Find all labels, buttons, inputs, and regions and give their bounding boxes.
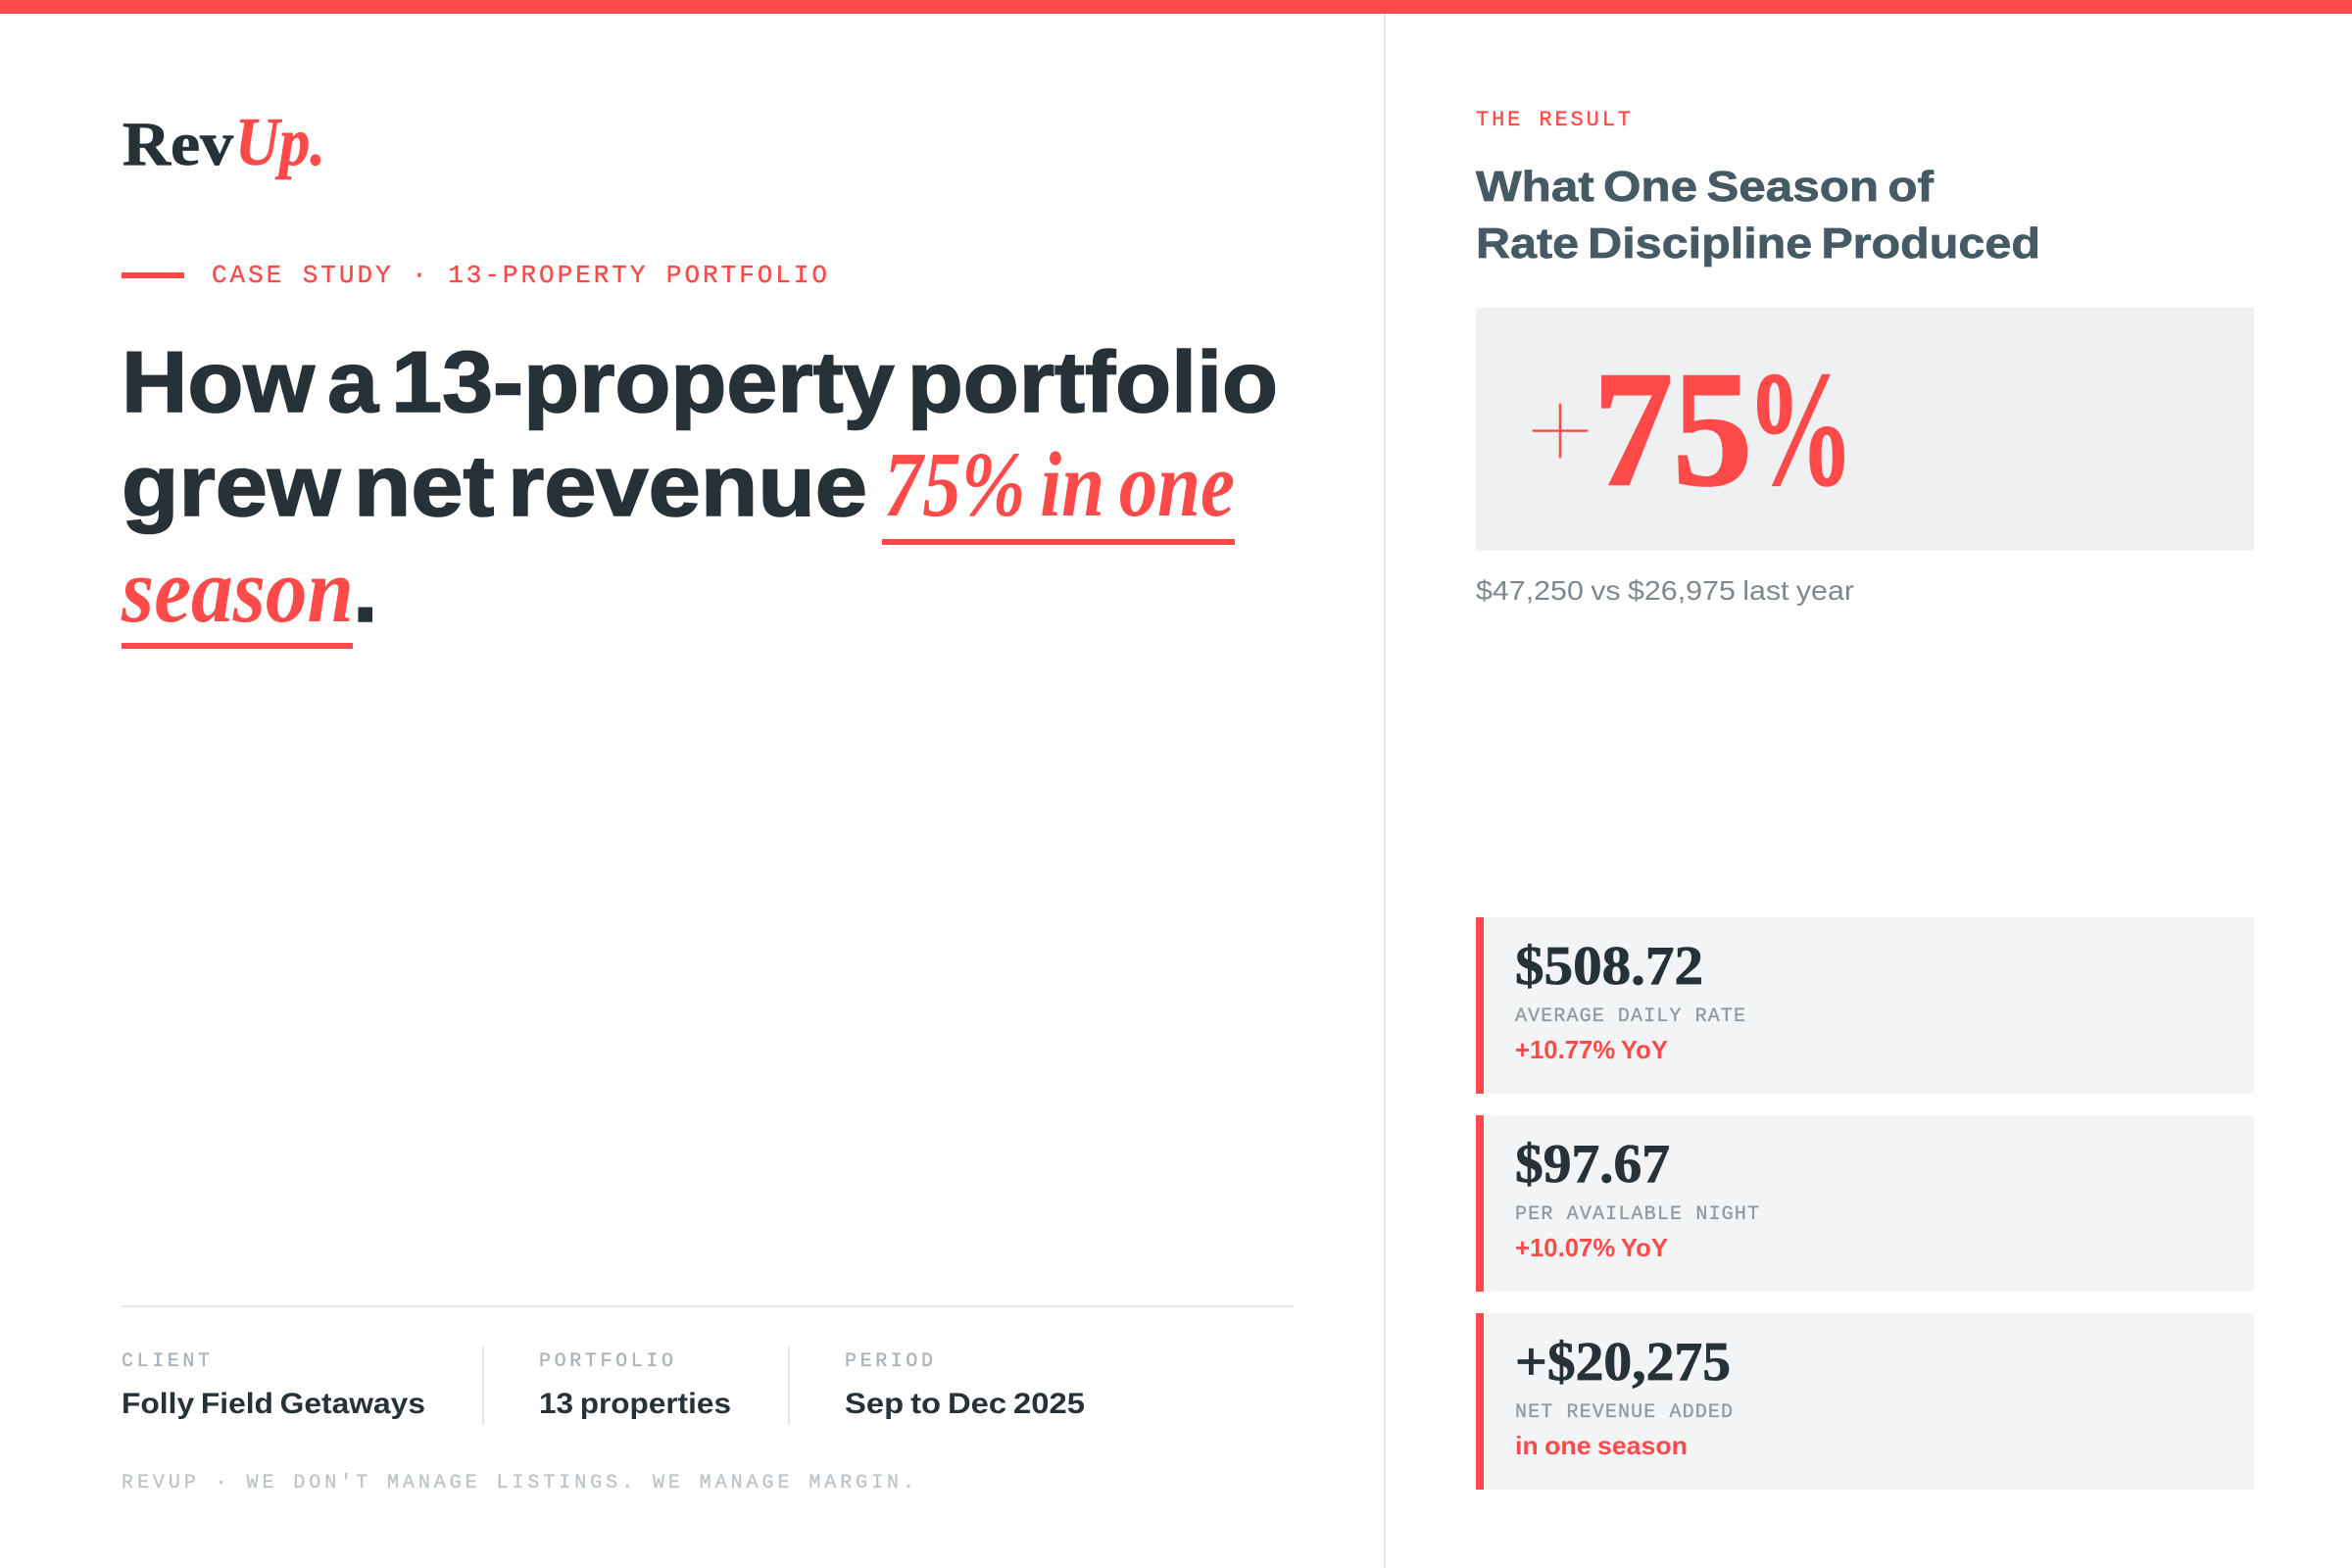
headline: How a 13-property portfolio	[122, 333, 1278, 430]
section label: THE RESULT	[1476, 108, 1631, 132]
headline: season	[121, 540, 354, 642]
card: average daily rate: AVERAGE DAILY RATE	[1515, 1005, 1745, 1028]
meta: client: Folly Field Getaways	[122, 1388, 425, 1420]
meta: portfolio	[539, 1350, 731, 1420]
card: per available night: +10.07% YoY	[1515, 1233, 1668, 1262]
meta: portfolio: 13 properties	[539, 1388, 731, 1420]
logo: Up.	[235, 105, 325, 180]
section heading: What One Season of	[1476, 163, 1934, 211]
section heading: Rate Discipline Produced	[1476, 220, 2040, 268]
meta: client	[122, 1350, 425, 1420]
card: net revenue added: in one season	[1515, 1431, 1688, 1460]
hero stat	[1476, 308, 2254, 551]
panel: left story	[121, 105, 1294, 1494]
top accent bar	[0, 0, 2352, 14]
card: per available night: PER AVAILABLE NIGHT	[1515, 1203, 1759, 1226]
footer tagline: REVUP · WE DON'T MANAGE LISTINGS. WE MANAGE MARGIN.	[122, 1472, 914, 1494]
hero comparison: $47,250 vs $26,975 last year	[1476, 575, 1854, 606]
eyebrow: CASE STUDY · 13-PROPERTY PORTFOLIO	[212, 261, 827, 290]
headline: grew net revenue	[122, 437, 867, 534]
headline: .	[353, 541, 378, 641]
panel: the result	[1476, 108, 2254, 1490]
logo	[122, 105, 325, 180]
hero stat: %	[1746, 338, 1854, 520]
card: net revenue added: NET REVENUE ADDED	[1515, 1401, 1733, 1424]
meta strip	[122, 1305, 1294, 1425]
card: average daily rate	[1476, 917, 2254, 1094]
hero stat: +	[1524, 361, 1596, 500]
card: average daily rate: +10.77% YoY	[1515, 1035, 1668, 1064]
logo: Rev	[122, 109, 233, 178]
card: net revenue added	[1476, 1313, 2254, 1490]
meta: portfolio: PORTFOLIO	[539, 1350, 673, 1373]
meta: client: CLIENT	[122, 1350, 210, 1373]
card: per available night	[1476, 1115, 2254, 1292]
headline: 75% in one	[884, 434, 1235, 536]
meta: period: PERIOD	[845, 1350, 933, 1373]
card: average daily rate: $508.72	[1515, 936, 1703, 997]
headline	[121, 333, 1278, 649]
card: net revenue added: +$20,275	[1515, 1332, 1731, 1393]
card: per available night: $97.67	[1515, 1134, 1670, 1195]
meta: period: Sep to Dec 2025	[845, 1388, 1085, 1420]
section heading	[1476, 163, 2040, 268]
meta: period	[845, 1350, 1085, 1420]
hero stat: 75	[1593, 338, 1752, 520]
